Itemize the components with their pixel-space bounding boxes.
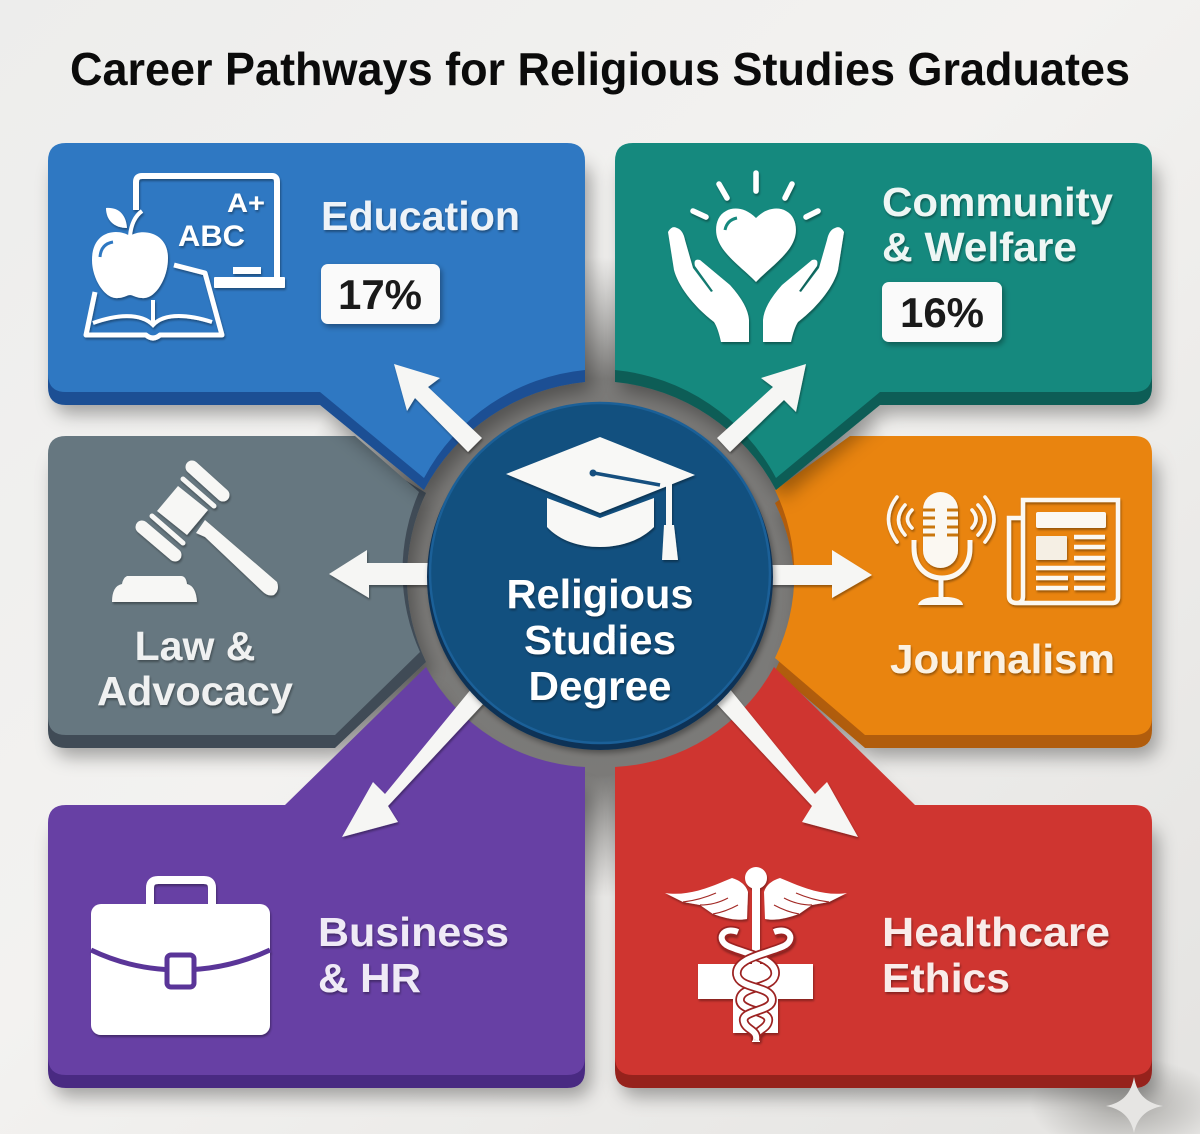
icon: sparkle watermark <box>1106 1077 1163 1133</box>
arrow: to law <box>329 550 430 598</box>
center disc <box>427 403 773 750</box>
icon: caduceus <box>665 867 847 1042</box>
icon: apple, book and chalkboard: A+ <box>227 188 265 218</box>
badge: 17% <box>321 264 440 324</box>
badge: 17%: 17% <box>338 271 422 318</box>
label: education: Education <box>321 193 520 239</box>
label: law and advocacy: Law & <box>135 623 255 669</box>
label: community and welfare: Community <box>882 179 1113 225</box>
icon: microphone and newspaper <box>888 492 1118 605</box>
label: business and hr: & HR <box>318 955 421 1001</box>
label: religious studies degree: Studies <box>524 617 676 663</box>
label: business and hr <box>318 909 509 1001</box>
arrow: to community <box>717 364 806 452</box>
badge: 16% <box>882 282 1002 342</box>
panel: education <box>48 143 585 490</box>
title: Career Pathways for Religious Studies Graduates <box>70 43 1130 95</box>
icon: heart in hands <box>668 173 844 342</box>
label: law and advocacy <box>97 623 293 714</box>
panel: law and advocacy <box>48 436 426 748</box>
label: business and hr: Business <box>318 909 509 955</box>
label: law and advocacy: Advocacy <box>97 668 293 714</box>
arrow: to journalism <box>770 550 872 598</box>
icon: graduation cap <box>506 437 695 560</box>
label: religious studies degree <box>506 571 694 709</box>
panel: healthcare ethics <box>615 667 1152 1088</box>
badge: 16%: 16% <box>900 289 984 336</box>
icon: apple, book and chalkboard <box>86 176 285 338</box>
panel: journalism <box>775 436 1152 748</box>
icon: gavel <box>112 467 278 602</box>
label: journalism: Journalism <box>890 636 1115 682</box>
arrow: to education <box>394 364 482 452</box>
icon: briefcase <box>91 880 270 1035</box>
label: healthcare ethics: Healthcare <box>882 909 1110 955</box>
icon: apple, book and chalkboard: ABC <box>178 220 245 253</box>
panel: business and hr <box>48 667 585 1088</box>
panel: community and welfare: & Welfare <box>882 224 1077 270</box>
label: healthcare ethics: Ethics <box>882 955 1010 1001</box>
label: religious studies degree: Religious <box>506 571 694 617</box>
arrow: to business <box>342 688 484 837</box>
label: healthcare ethics <box>882 909 1110 1001</box>
arrow: to healthcare <box>716 688 858 837</box>
label: religious studies degree: Degree <box>528 663 672 709</box>
panel: community and welfare <box>615 143 1152 490</box>
